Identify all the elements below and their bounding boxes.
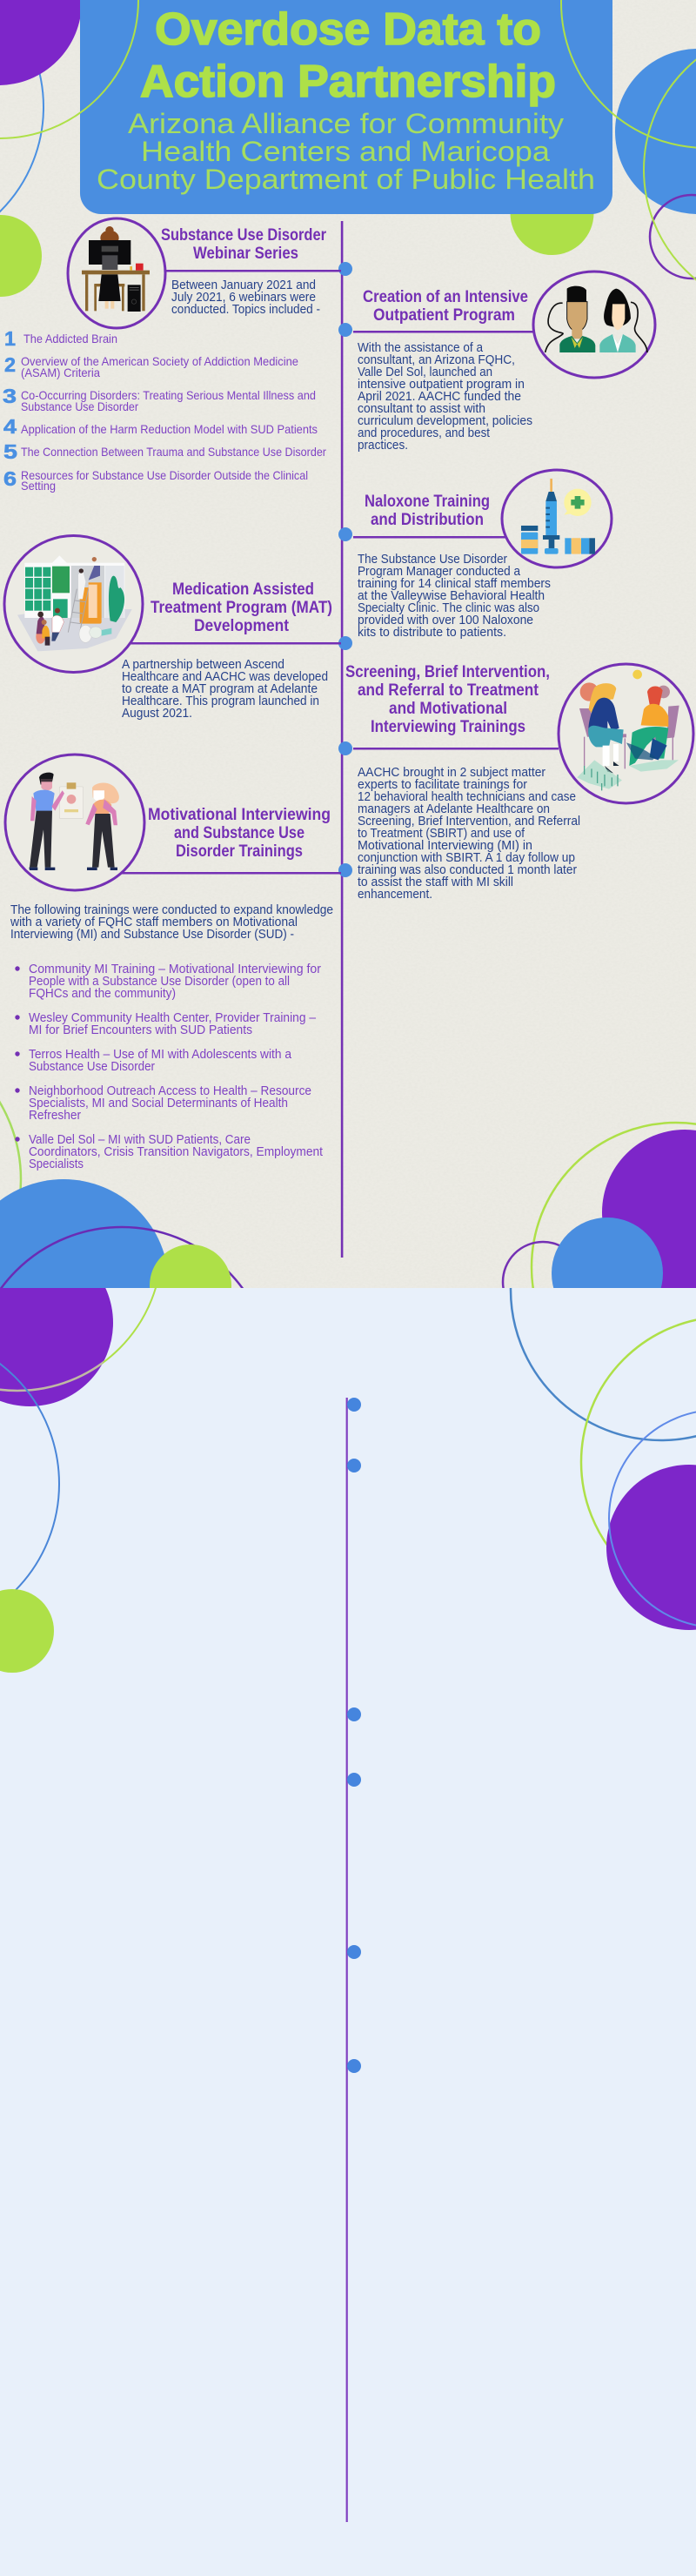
- icon: person at desk: [68, 218, 165, 328]
- icon: two masked people with clipboard: [5, 755, 144, 890]
- text block: experts to facilitate trainings for: [358, 778, 527, 792]
- title: Overdose Data to: [155, 4, 541, 55]
- heading: Motivational Interviewing: [148, 805, 331, 824]
- connector: [165, 270, 341, 272]
- numbered topic list: 2: [4, 353, 16, 376]
- text block: consultant to assist with: [358, 402, 485, 416]
- panel: motivational interviewing: [5, 755, 341, 1171]
- numbered topic list: 3: [3, 385, 17, 407]
- decorative circles: bottom of paper panel: [0, 1100, 696, 1288]
- subtitle: County Department of Public Health: [97, 164, 595, 195]
- text block: Specialty Clinic. The clinic was also: [358, 601, 539, 615]
- numbered topic list: Substance Use Disorder: [21, 399, 138, 413]
- background: lower pale blue page: [0, 1288, 696, 2576]
- numbered topic list: [3, 327, 326, 493]
- text block: The following trainings were conducted to expand knowledge: [10, 903, 333, 917]
- panel: webinar series: [3, 218, 341, 493]
- bulleted training list: FQHCs and the community): [29, 987, 176, 1001]
- text block: consultant, an Arizona FQHC,: [358, 353, 515, 367]
- text block: The Substance Use Disorder: [358, 553, 507, 567]
- bulleted training list: [15, 963, 323, 1171]
- heading: Medication Assisted: [172, 580, 314, 599]
- bulleted training list: Coordinators, Crisis Transition Navigators, Employment: [29, 1145, 323, 1159]
- numbered topic list: Co-Occurring Disorders: Treating Serious Mental Illness and: [21, 388, 316, 402]
- heading: Development: [194, 616, 289, 635]
- numbered topic list: Overview of the American Society of Addiction Medicine: [21, 354, 298, 368]
- text block: practices.: [358, 439, 408, 453]
- timeline: upper vertical line and nodes: [338, 221, 352, 1258]
- bulleted training list: Refresher: [29, 1109, 81, 1123]
- panel: screening, brief intervention, referral: [345, 662, 693, 902]
- text block: with a variety of FQHC staff members on Motivational: [10, 916, 298, 929]
- connector: [353, 331, 533, 332]
- numbered topic list: 5: [3, 440, 17, 463]
- title: Action Partnership: [140, 57, 556, 107]
- text block: Healthcare and AACHC was developed: [122, 670, 328, 684]
- connector: [353, 536, 505, 538]
- icon: two women talking: [559, 664, 693, 803]
- numbered topic list: Setting: [21, 479, 56, 493]
- text block: AACHC brought in 2 subject matter: [358, 766, 545, 780]
- numbered topic list: 6: [3, 467, 17, 490]
- panel: naloxone training: [353, 470, 612, 640]
- text block: Healthcare. This program launched in: [122, 694, 319, 708]
- text block: kits to distribute to patients.: [358, 626, 506, 640]
- heading: and Referral to Treatment: [358, 681, 539, 700]
- header panel: [0, 0, 696, 312]
- subtitle: [97, 108, 595, 195]
- numbered topic list: The Connection Between Trauma and Substance Use Disorder: [21, 445, 326, 459]
- text block: August 2021.: [122, 707, 192, 721]
- text block: 12 behavioral health technicians and case: [358, 790, 576, 804]
- text block: [358, 766, 580, 902]
- numbered topic list: 4: [3, 415, 17, 438]
- heading: Outpatient Program: [373, 305, 515, 325]
- bulleted training list: Community MI Training – Motivational Interviewing for: [29, 963, 321, 976]
- text block: Screening, Brief Intervention, and Referral: [358, 815, 580, 828]
- text block: at the Valleywise Behavioral Health: [358, 589, 545, 603]
- text block: intensive outpatient program in: [358, 378, 525, 392]
- text block: July 2021, 6 webinars were: [171, 291, 316, 305]
- numbered topic list: (ASAM) Criteria: [21, 366, 100, 379]
- text block: training was also conducted 1 month later: [358, 863, 577, 877]
- panel: medication assisted treatment: [4, 536, 341, 721]
- text block: curriculum development, policies: [358, 414, 532, 428]
- numbered topic list: Application of the Harm Reduction Model with SUD Patients: [21, 422, 318, 436]
- icon: clinic building and medication: [4, 536, 143, 672]
- timeline: lower vertical line and nodes: [346, 1398, 361, 2522]
- connector: [122, 872, 341, 874]
- text block: A partnership between Ascend: [122, 658, 284, 672]
- background: textured paper panel: [0, 0, 696, 1288]
- text block: conducted. Topics included -: [171, 303, 320, 317]
- bulleted training list: People with a Substance Use Disorder (open to all: [29, 975, 290, 989]
- text block: Between January 2021 and: [171, 278, 316, 292]
- text block: to assist the staff with MI skill: [358, 875, 513, 889]
- numbered topic list: The Addicted Brain: [23, 332, 117, 345]
- text block: conjunction with SBIRT. A 1 day follow up: [358, 851, 575, 865]
- text block: Interviewing (MI) and Substance Use Disorder (SUD) -: [10, 928, 294, 942]
- text block: April 2021. AACHC funded the: [358, 390, 521, 404]
- subtitle: Health Centers and Maricopa: [141, 136, 551, 167]
- text block: managers at Adelante Healthcare on: [358, 802, 550, 816]
- heading: Webinar Series: [193, 244, 298, 263]
- heading: and Distribution: [371, 510, 484, 529]
- text block: to Treatment (SBIRT) and use of: [358, 827, 525, 841]
- text block: [171, 278, 320, 317]
- heading: [345, 662, 550, 736]
- heading: [161, 225, 326, 263]
- text block: and procedures, and best: [358, 426, 490, 440]
- numbered topic list: 1: [4, 327, 16, 350]
- bulleted training list: Specialists: [29, 1157, 84, 1171]
- text block: provided with over 100 Naloxone: [358, 614, 533, 627]
- text block: [358, 553, 551, 640]
- bulleted training list: Wesley Community Health Center, Provider Training –: [29, 1011, 317, 1025]
- text block: enhancement.: [358, 888, 432, 902]
- subtitle: Arizona Alliance for Community: [128, 108, 565, 139]
- heading: and Substance Use: [174, 823, 304, 842]
- decorative circles: top of paper panel: [0, 0, 696, 297]
- text block: [10, 903, 333, 942]
- bulleted training list: Valle Del Sol – MI with SUD Patients, Care: [29, 1133, 251, 1147]
- numbered topic list: Resources for Substance Use Disorder Outside the Clinical: [21, 468, 308, 482]
- heading: Naloxone Training: [365, 492, 490, 511]
- bulleted training list: MI for Brief Encounters with SUD Patients: [29, 1023, 252, 1037]
- heading: [151, 580, 332, 635]
- heading: [365, 492, 490, 529]
- text block: [122, 658, 328, 721]
- heading: Disorder Trainings: [176, 842, 303, 861]
- heading: Screening, Brief Intervention,: [345, 662, 550, 681]
- decorative circles: lower page: [0, 1288, 696, 1673]
- text block: [358, 341, 532, 453]
- text block: With the assistance of a: [358, 341, 484, 355]
- heading: [363, 287, 528, 325]
- connector: [353, 748, 559, 750]
- text block: Program Manager conducted a: [358, 565, 521, 579]
- icon: two clinicians: [533, 272, 655, 378]
- bulleted training list: Specialists, MI and Social Determinants of Health: [29, 1097, 288, 1110]
- heading: [148, 805, 331, 861]
- heading: Substance Use Disorder: [161, 225, 326, 245]
- heading: Creation of an Intensive: [363, 287, 528, 306]
- title: [140, 4, 556, 107]
- connector: [130, 642, 341, 644]
- heading: Treatment Program (MAT): [151, 598, 332, 617]
- bulleted training list: Terros Health – Use of MI with Adolescents with a: [29, 1048, 292, 1062]
- text block: to create a MAT program at Adelante: [122, 682, 318, 696]
- text block: Motivational Interviewing (MI) in: [358, 839, 532, 853]
- panel: intensive outpatient program: [353, 272, 655, 453]
- text block: Valle Del Sol, launched an: [358, 366, 492, 379]
- heading: Interviewing Trainings: [371, 717, 525, 736]
- bulleted training list: Neighborhood Outreach Access to Health – Resource: [29, 1084, 311, 1098]
- icon: syringe and vials: [502, 470, 612, 567]
- text block: training for 14 clinical staff members: [358, 577, 551, 591]
- heading: and Motivational: [389, 699, 507, 718]
- bulleted training list: Substance Use Disorder: [29, 1060, 155, 1074]
